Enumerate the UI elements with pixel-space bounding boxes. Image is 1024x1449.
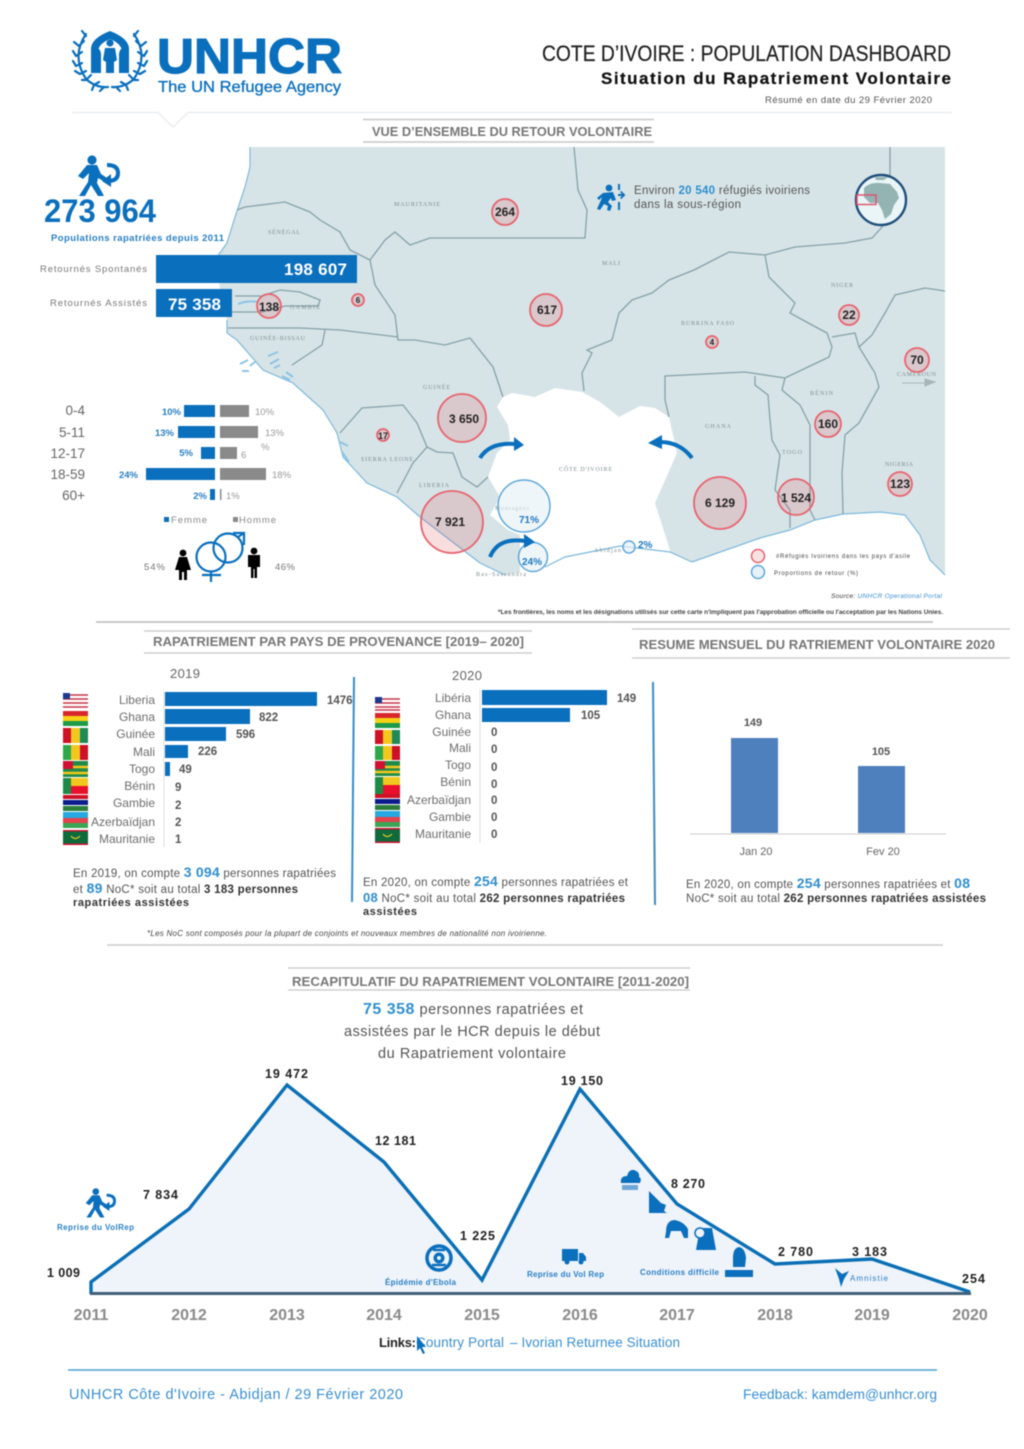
return proportion circles: [498, 480, 635, 572]
text: 2019 summary: [73, 864, 336, 909]
icon: VolRep restart: [57, 1188, 134, 1232]
values: 19 472: [265, 1067, 308, 1081]
date: Résumé en date du 29 Février 2020: [765, 95, 932, 106]
country names 2019: Togo: [129, 762, 155, 776]
map country labels: NIGER: [831, 283, 853, 289]
country names 2019: Mali: [133, 745, 155, 759]
years: 2014: [366, 1307, 402, 1324]
values 2019: 49: [179, 764, 192, 776]
links: – Ivorian Returnee Situation: [510, 1335, 680, 1350]
values: [47, 1067, 985, 1286]
monthly values: 149: [744, 717, 762, 729]
icon: landslide: [649, 1191, 667, 1213]
age labels: 12-17: [50, 446, 85, 461]
map country labels: CÔTE D'IVOIRE: [559, 465, 612, 473]
text: 2019 summary: En 2019, on compte 3 094 personnes rapatriées: [73, 864, 336, 880]
bar: spontaneous: Retournés Spontanés: [40, 264, 147, 275]
years: 2017: [659, 1307, 695, 1324]
bars 2019: [165, 692, 317, 776]
age labels: 60+: [62, 488, 85, 503]
footer left: UNHCR Côte d'Ivoire - Abidjan / 29 Février 2020: [69, 1387, 403, 1403]
text: 2020 summary: 08 NoC* soit au total 262 personnes rapatriées: [363, 890, 625, 905]
map country labels: SIERRA LEONE: [361, 457, 413, 463]
gender female: 54%: [144, 562, 166, 573]
values 2019: 596: [236, 729, 255, 741]
circle values: 4: [710, 338, 715, 347]
chart: 2019 by country: [63, 666, 353, 909]
arrow: toward Cameroon: [902, 379, 935, 386]
female percentages: 24%: [119, 470, 139, 481]
country names 2020: Mauritanie: [415, 827, 471, 841]
total caption: Populations rapatriées depuis 2011: [51, 233, 225, 244]
icon: boat, difficult conditions: [640, 1247, 753, 1277]
circle values: 123: [890, 477, 910, 491]
female percentages: 2%: [193, 491, 208, 502]
bar: spontaneous: 198 607: [284, 260, 347, 279]
text: 2019 summary: rapatriées assistées: [73, 897, 189, 909]
male percentages: 13%: [265, 428, 285, 439]
monthly bars: [731, 738, 905, 833]
circle values: 3 650: [449, 412, 479, 426]
text: 2020 summary: En 2020, on compte 254 personnes rapatriées et: [363, 873, 629, 889]
years: 2020: [952, 1307, 988, 1324]
links: Country Portal: [416, 1335, 504, 1350]
country names 2019: Ghana: [119, 710, 155, 724]
pyramid legend: Femme: [171, 515, 207, 526]
bar: spontaneous: [40, 255, 357, 283]
circle values: 6: [356, 296, 361, 305]
map country labels: GUINÉE-BISSAU: [250, 334, 306, 342]
icon: VolRep restart: Reprise du VolRep: [57, 1223, 134, 1232]
section heading: resume mensuel: RESUME MENSUEL DU RATRIEMENT VOLONTAIRE 2020: [639, 637, 995, 652]
age labels: 0-4: [65, 403, 85, 418]
map country labels: BURKINA FASO: [681, 321, 735, 327]
chart: monthly 2020: [686, 717, 986, 905]
female percentages: 13%: [155, 428, 175, 439]
values 2019: 822: [259, 712, 278, 724]
values 2020: 0: [491, 727, 497, 739]
footnote NoC: *Les NoC sont composés pour la plupart de conjoints et nouveaux membres de nationalité non ivoirienne.: [147, 929, 547, 938]
baseline: [90, 1292, 971, 1295]
map country labels: LIBERIA: [419, 483, 450, 489]
male percentages: 18%: [272, 470, 292, 481]
map country labels: BÉNIN: [810, 389, 834, 397]
circle values: 7 921: [435, 515, 465, 529]
map country labels: Bas-Sassandra: [476, 572, 526, 578]
section heading: vue d'ensemble: VUE D’ENSEMBLE DU RETOUR VOLONTAIRE: [372, 124, 652, 139]
country names 2020: Azerbaïdjan: [407, 793, 471, 807]
bar: assisted: Retournés Assistés: [50, 298, 147, 309]
values 2019: 2: [175, 817, 181, 829]
values 2019: 9: [175, 782, 181, 794]
male percentages: 1%: [226, 491, 240, 502]
section heading: recapitulatif: [288, 968, 690, 990]
section heading: recapitulatif: RECAPITULATIF DU RAPATRIEMENT VOLONTAIRE [2011-2020]: [292, 974, 689, 989]
age labels: 18-59: [50, 467, 85, 482]
map country labels: GUINÉE: [423, 383, 450, 391]
years: [74, 1307, 988, 1324]
bar: assisted: [50, 289, 232, 317]
icon: refugees + text: Environ 20 540 réfugiés ivoiriens: [634, 185, 810, 197]
female bars: [146, 405, 215, 500]
values 2020: 0: [491, 779, 497, 791]
map country labels: TOGO: [782, 450, 803, 456]
values 2019: 1: [175, 834, 182, 846]
icon: returnee: [78, 155, 118, 196]
key figure panel: [40, 155, 357, 317]
years: 2019: [854, 1307, 890, 1324]
pyramid legend: Homme: [239, 515, 276, 526]
text: recap summary: assistées par le HCR depuis le début: [344, 1024, 600, 1040]
text: monthly summary: [686, 875, 986, 905]
icon: globe locator: [856, 175, 906, 225]
icon: car: [665, 1220, 688, 1238]
monthly axis: Fev 20: [866, 846, 900, 858]
country names 2020: Mali: [449, 741, 471, 755]
circle values: 160: [818, 417, 838, 431]
country names 2019: Bénin: [124, 779, 155, 793]
values 2020: 0: [491, 829, 497, 841]
bars 2020: [482, 690, 607, 722]
chart: 2020 by country: [363, 668, 636, 918]
icon: gender symbols: [196, 533, 244, 582]
map country labels: GAMBIE: [290, 305, 320, 311]
country names 2020: Ghana: [435, 708, 471, 722]
country names 2020: Bénin: [440, 775, 471, 789]
male bars: [220, 405, 266, 500]
circle values: 617: [537, 303, 557, 317]
years: 2018: [757, 1307, 793, 1324]
flags 2019: [63, 693, 88, 845]
links: [379, 1335, 680, 1354]
section heading: rapatriement par pays: [144, 631, 532, 653]
flags 2020: [375, 697, 400, 843]
circle values: 1 524: [781, 491, 811, 505]
map country labels: Montagnes: [495, 506, 530, 512]
map land: [217, 147, 945, 575]
circle values: 138: [259, 300, 279, 314]
values: 1 009: [47, 1266, 80, 1280]
circle values: 6 129: [705, 496, 735, 510]
monthly axis: [739, 846, 900, 858]
years: 2015: [464, 1307, 500, 1324]
text: recap summary: du Rapatriement volontaire: [378, 1046, 566, 1062]
footer right: Feedback: kamdem@unhcr.org: [743, 1387, 937, 1402]
values: 8 270: [671, 1177, 705, 1191]
proportion labels: [519, 515, 653, 568]
years: 2016: [562, 1307, 598, 1324]
total returnees: 273 964: [44, 193, 156, 229]
years: 2011: [74, 1307, 108, 1324]
links: Links:: [379, 1335, 416, 1350]
proportion labels: 2%: [638, 540, 653, 551]
circle values: 22: [842, 308, 856, 322]
values: 1 225: [460, 1229, 495, 1243]
values: 2 780: [778, 1245, 813, 1259]
map borders: [228, 147, 945, 528]
monthly axis: Jan 20: [739, 846, 773, 858]
logo tagline: The UN Refugee Agency: [158, 79, 341, 96]
map legend: #Réfugiés Ivoiriens dans les pays d'asile: [776, 554, 911, 560]
values: 12 181: [375, 1134, 416, 1148]
values: 254: [962, 1272, 985, 1286]
subtitle: Situation du Rapatriement Volontaire: [601, 69, 951, 88]
male percentages: %: [261, 442, 270, 453]
map country labels: CAMEROUN: [897, 372, 937, 378]
logo wordmark: UNHCR: [157, 30, 342, 84]
monthly values: [744, 717, 890, 758]
gender male: [248, 548, 296, 578]
map: Cote d'Ivoire: [488, 388, 677, 575]
country names 2019: Gambie: [113, 796, 155, 810]
values: 19 150: [561, 1074, 603, 1088]
values 2019: 1476: [327, 695, 353, 707]
icon: refugees + text: dans la sous-région: [634, 199, 741, 211]
icon: refugees + text: [597, 184, 810, 211]
icon: biohazard, Ebola: Épidémie d'Ebola: [385, 1278, 457, 1287]
icon: blocked road: [695, 1228, 716, 1250]
proportion labels: 24%: [522, 557, 542, 568]
age labels: [50, 403, 85, 503]
circle values: 70: [910, 353, 924, 367]
male percentages: [226, 407, 292, 502]
gender male: 46%: [275, 562, 296, 573]
years: 2012: [171, 1307, 207, 1324]
icon: UNHCR emblem: [73, 31, 147, 91]
values 2020: 0: [491, 795, 497, 807]
country names 2019: Guinée: [116, 727, 155, 741]
map country labels: Abidjan: [594, 548, 621, 554]
female percentages: [119, 407, 208, 502]
map country labels: SÉNÉGAL: [268, 228, 300, 236]
section heading: resume mensuel: [632, 629, 1010, 658]
country names 2020: Gambie: [429, 810, 471, 824]
text: 2020 summary: assistées: [363, 906, 417, 918]
line: [91, 1085, 970, 1294]
circle values: [259, 205, 924, 529]
values 2020: 0: [491, 744, 497, 756]
year label: 2019: [170, 666, 200, 681]
logo: UNHCR: [73, 30, 342, 96]
country names 2020: Libéria: [435, 691, 471, 705]
country names 2019: Liberia: [119, 693, 155, 707]
male percentages: 10%: [255, 407, 275, 418]
map legend: Proportions de retour (%): [774, 571, 858, 577]
proportion labels: 71%: [519, 515, 539, 526]
values 2019: 226: [198, 746, 217, 758]
text: monthly summary: NoC* soit au total 262 personnes rapatriées assistées: [686, 893, 986, 905]
years: 2013: [269, 1307, 305, 1324]
icon: biohazard, Ebola: [385, 1246, 457, 1287]
values 2020: 149: [617, 693, 636, 705]
map: [217, 147, 945, 616]
section heading: vue d'ensemble: [363, 120, 654, 142]
monthly values: 105: [872, 746, 890, 758]
gender female: [144, 550, 191, 580]
bar: assisted: 75 358: [168, 295, 221, 314]
map country labels: MAURITANIE: [394, 202, 440, 208]
text: 2020 summary: [363, 873, 629, 918]
icon: bird, amnesty: [835, 1268, 889, 1287]
map country labels: MALI: [602, 261, 620, 267]
text: recap summary: [344, 1001, 600, 1062]
female percentages: 10%: [162, 407, 182, 418]
age pyramid: [50, 403, 296, 582]
icon: boat, difficult conditions: Conditions difficile: [640, 1268, 720, 1277]
icon: cloud rain: [621, 1170, 641, 1190]
year label: 2020: [452, 668, 482, 683]
area: [91, 1085, 970, 1293]
values 2020: [491, 693, 636, 841]
country names 2019: Mauritanie: [99, 832, 155, 846]
text: 2019 summary: et 89 NoC* soit au total 3 183 personnes: [73, 880, 298, 896]
disclaimer: *Les frontières, les noms et les désignations utilisés sur cette carte n'impliquent pas l'approbation officielle ou l'acceptation par les Nations Unies.: [498, 609, 943, 616]
country names 2020: [407, 691, 471, 841]
map islands and river: [238, 301, 349, 462]
values 2019: [175, 695, 353, 846]
arrows: return flows: [480, 435, 692, 557]
map legend: [752, 550, 911, 578]
age labels: 5-11: [59, 425, 85, 440]
text: recap summary: 75 358 personnes rapatriées et: [363, 1001, 583, 1018]
title: COTE D’IVOIRE : POPULATION DASHBOARD: [542, 41, 951, 66]
icon: truck, VolRep restart: [527, 1249, 604, 1279]
values 2020: 105: [581, 710, 601, 722]
values 2019: 2: [175, 800, 181, 812]
map country labels: GHANA: [705, 424, 732, 430]
icon: truck, VolRep restart: Reprise du Vol Rep: [527, 1270, 604, 1279]
country names 2019: Azerbaïdjan: [91, 815, 155, 829]
circle values: 17: [378, 431, 388, 441]
country names 2019: [91, 693, 155, 846]
values: 7 834: [143, 1188, 178, 1202]
circle values: 264: [495, 205, 515, 219]
country names 2020: Togo: [445, 758, 471, 772]
chart: returns 2011-2020: [47, 1067, 988, 1324]
return circles: [257, 199, 929, 553]
icon: bird, amnesty: Amnistie: [850, 1274, 889, 1283]
section heading: rapatriement par pays: RAPATRIEMENT PAR PAYS DE PROVENANCE [2019– 2020]: [153, 634, 524, 649]
map country labels: [250, 202, 937, 578]
pyramid legend: [164, 515, 276, 526]
female percentages: 5%: [179, 448, 194, 459]
source: Source: UNHCR Operational Portal: [831, 593, 943, 600]
values: 3 183: [852, 1245, 887, 1259]
map country labels: NIGERIA: [885, 462, 914, 468]
values 2020: 0: [491, 812, 497, 824]
male percentages: 6: [241, 450, 246, 461]
values 2020: 0: [491, 762, 497, 774]
country names 2020: Guinée: [432, 725, 471, 739]
map coastline: [217, 147, 945, 575]
text: monthly summary: En 2020, on compte 254 personnes rapatriées et 08: [686, 875, 970, 891]
